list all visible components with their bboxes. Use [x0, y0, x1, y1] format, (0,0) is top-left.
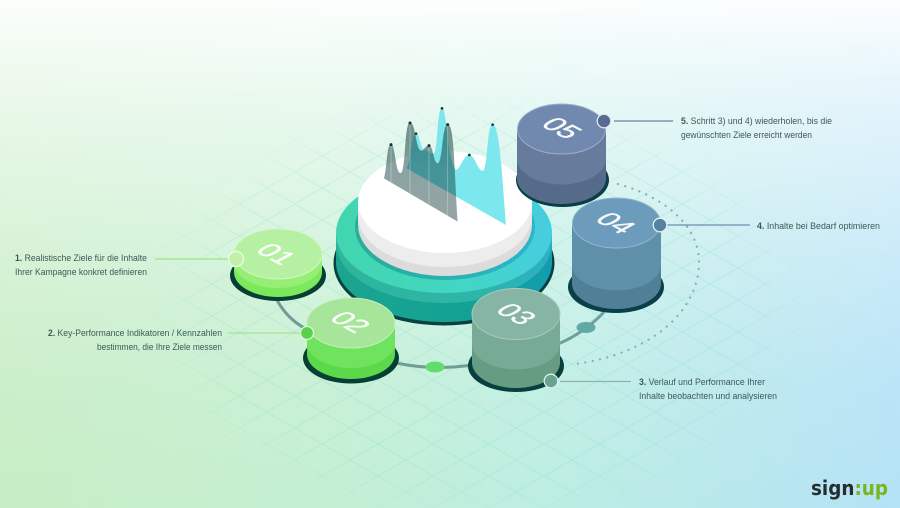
cylinder 04: 04 [589, 208, 643, 238]
callout 4: 4. Inhalte bei Bedarf optimieren [757, 221, 880, 231]
chart drop lines [391, 123, 448, 216]
cylinder 03: 03 [489, 299, 544, 329]
cylinder 05: 05 [535, 113, 589, 143]
cylinder 04 [568, 198, 664, 313]
callout 5: gewünschten Ziele erreicht werden [681, 130, 812, 140]
callout 3 [544, 374, 777, 401]
connector: 01 to 02 [277, 300, 306, 329]
cylinder 01 [230, 229, 326, 301]
connector: 02 to 03 with node [396, 362, 472, 372]
callout 3: Inhalte beobachten und analysieren [639, 391, 777, 401]
callout 5: 5. Schritt 3) und 4) wiederholen, bis die [681, 116, 832, 126]
teal base [334, 173, 554, 326]
isometric floor grid [170, 106, 787, 508]
cylinder 02: 02 [323, 307, 378, 337]
area chart [384, 107, 506, 225]
cylinder 03 [468, 288, 564, 392]
cylinder 01: 01 [249, 239, 304, 269]
chart peak dots [389, 107, 494, 156]
callout 1: 1. Realistische Ziele für die Inhalte [15, 253, 147, 263]
callout 1 [15, 252, 244, 277]
gray area series [384, 123, 458, 222]
connector: 03 to 04 with node [558, 312, 604, 344]
callout 2: bestimmen, die Ihre Ziele messen [97, 342, 222, 352]
callout 3: 3. Verlauf und Performance Ihrer [639, 377, 765, 387]
cylinder 02 [303, 298, 399, 384]
callout 4 [653, 218, 880, 232]
cyan area series [407, 108, 506, 225]
logo: sign:up: sign:up [811, 476, 888, 500]
white disc [358, 151, 532, 276]
central platform [334, 151, 554, 326]
callout 2 [48, 326, 314, 352]
callout 2: 2. Key-Performance Indikatoren / Kennzahlen [48, 328, 222, 338]
cylinder 05 [516, 104, 609, 207]
dotted orbit arc [575, 184, 699, 364]
callout 5 [597, 114, 832, 140]
callout 1: Ihrer Kampagne konkret definieren [15, 267, 147, 277]
